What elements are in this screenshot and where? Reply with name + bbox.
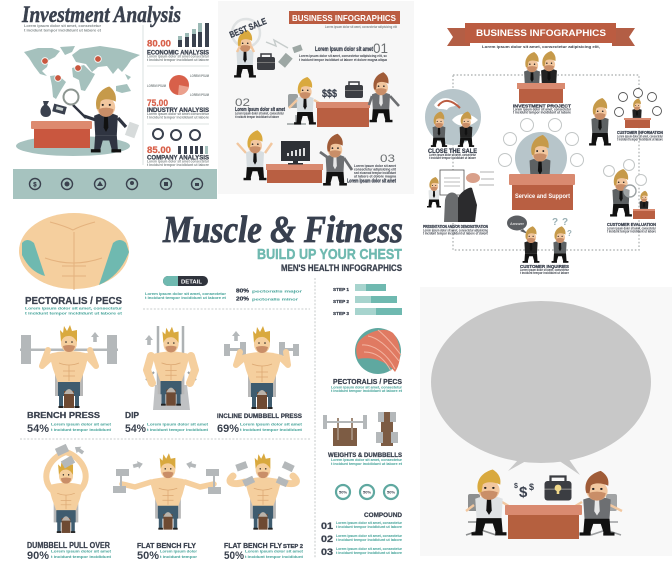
detail text: Lorem ipsum dolor sit amet, consectetur <box>145 291 226 296</box>
text: t incidunt tempor incididunt ut labore <box>147 163 209 167</box>
pie chart <box>169 75 189 95</box>
dumbbells <box>235 461 295 487</box>
dumbbell <box>55 444 75 468</box>
athlete <box>46 452 86 533</box>
weight bench <box>323 415 367 446</box>
step bars: STEP 2 <box>333 299 349 305</box>
ring charts: 50% <box>387 490 395 494</box>
world map <box>24 46 140 99</box>
compound list: Lorem ipsum dolor sit amet, consectetur <box>336 533 402 538</box>
label: Lorem ipsum dolor sit amet, consectetur adipisicing <box>423 228 488 232</box>
step 3 text: ut labore et dolore magna <box>354 174 397 178</box>
arrow <box>145 335 153 345</box>
flat bench fly step 2: t incidunt tempor incididunt <box>245 554 304 559</box>
ring charts: 50% <box>363 490 371 494</box>
dip <box>125 410 209 435</box>
exercise: flat bench fly <box>113 453 221 530</box>
right businessman <box>572 471 622 536</box>
flat bench fly: Lorem ipsum dolor <box>160 548 197 554</box>
step 1 text: Lorem ipsum dolor sit amet <box>315 46 374 53</box>
weights heading: WEIGHTS & DUMBBELLS <box>328 452 402 459</box>
customer evaluation <box>604 160 657 234</box>
dotted loop <box>453 75 639 250</box>
arrow <box>91 332 99 342</box>
athlete <box>230 453 296 530</box>
intro text: Lorem ipsum dolor sit amet, consectetur <box>24 24 102 28</box>
step 3 text: sed eiusmod tempor incididunt <box>354 170 396 175</box>
dumbbell pull over: t incidunt tempor incididunt <box>51 554 112 559</box>
label <box>617 130 663 142</box>
dumbbell rack <box>376 412 398 446</box>
exercise: dip <box>145 326 196 410</box>
ribbon banner <box>447 23 635 46</box>
main title: Muscle & Fitness <box>162 209 403 251</box>
dip frame <box>146 326 196 410</box>
weights text: t incidunt tempor incididunt ut labore et <box>331 461 403 466</box>
muscle circle <box>355 328 401 374</box>
right chair <box>591 494 621 535</box>
subtitle: BUILD UP YOUR CHEST <box>257 247 402 263</box>
dashed dividers <box>20 278 315 558</box>
step 2 text: Lorem ipsum dolor sit amet, consectetur <box>235 110 284 116</box>
dollar signs <box>514 482 534 501</box>
compound list: Lorem ipsum dolor sit amet, consectetur <box>336 520 402 525</box>
percentages: 20% <box>236 296 249 302</box>
incline dumbbell press: t incidunt tempor incididunt <box>240 427 303 432</box>
small man at desk <box>633 191 655 219</box>
pie labels: LOREM IPSUM <box>190 74 209 78</box>
bench press: BRENCH PRESS <box>27 410 100 420</box>
detail text: t incidunt tempor incididunt ut labore et <box>145 295 227 300</box>
heading: INDUSTRY ANALYSIS <box>147 107 210 114</box>
briefcase with bulb <box>544 476 572 500</box>
dip: Lorem ipsum dolor sit amet <box>147 422 209 426</box>
ribbon subtitle: Lorem ipsum dolor sit amet, consectetur adipisicing elit, <box>482 44 600 49</box>
arrows <box>132 460 197 470</box>
step 3 text: Lorem ipsum dolor sit amet <box>354 163 397 168</box>
dip: DIP <box>125 410 139 420</box>
label: CUSTOMER INFORMATION <box>617 130 663 135</box>
weights text <box>331 457 403 466</box>
question marks: ? <box>562 217 568 228</box>
step 2 text: 02 <box>235 97 250 109</box>
label: CLOSE THE SALE <box>428 149 477 155</box>
desk <box>31 121 92 148</box>
exercise: dumbbell pull over <box>46 444 86 533</box>
divider <box>143 25 209 165</box>
people pictogram <box>178 146 208 154</box>
customer inquiries <box>507 216 572 275</box>
desk: Service and Support <box>515 193 571 200</box>
ribbon banner: BUSINESS INFOGRAPHICS <box>476 28 606 39</box>
speech bubble: Answer <box>510 221 524 226</box>
monitor <box>281 141 310 164</box>
compound list <box>321 520 403 557</box>
step 2 chair <box>287 94 306 124</box>
desk <box>505 505 582 539</box>
icon band <box>13 169 217 199</box>
industry analysis <box>147 74 210 120</box>
pecs heading right: PECTORALIS / PECS <box>333 379 402 386</box>
pecs text: t incidunt tempor incididunt ut labore et <box>25 310 123 316</box>
dumbbell pull over: Lorem ipsum dolor sit amet <box>51 548 112 554</box>
heading: COMPANY ANALYSIS <box>147 154 210 162</box>
incline dumbbell press: INCLINE DUMBBELL PRESS <box>217 413 303 420</box>
flat bench fly: 50% <box>137 550 159 562</box>
value: 80.00 <box>147 38 171 50</box>
labels: row 1 <box>27 410 303 435</box>
ring charts: 50% <box>339 490 347 494</box>
step 3 text: consectetur adipisicing elit <box>354 166 397 172</box>
man with magnifier <box>610 169 636 217</box>
step 2 text: t incidunt tempor incididunt ut labore <box>235 114 279 119</box>
label <box>428 149 477 160</box>
businessman <box>84 87 126 152</box>
ring charts <box>153 129 200 140</box>
step bars <box>333 284 402 317</box>
bench press: 54% <box>27 423 49 435</box>
compound heading: COMPOUND <box>364 512 402 519</box>
exercise: incline dumbbell press <box>224 326 299 409</box>
floor ellipse <box>16 136 130 156</box>
label <box>423 224 489 236</box>
flat bench fly: FLAT BENCH FLY <box>137 543 196 550</box>
dollar signs: $ <box>514 483 518 490</box>
label: CUSTOMER EVALUATION <box>607 222 656 227</box>
pie labels: LOREM IPSUM <box>147 84 166 88</box>
presenter <box>427 177 441 208</box>
ring charts <box>336 485 398 499</box>
dumbbell pull over <box>27 541 112 562</box>
company analysis <box>147 129 210 167</box>
pecs text right: t incidunt tempor incididunt ut labore et <box>331 388 403 393</box>
label: Lorem ipsum dolor sit amet, consectetur <box>429 152 476 157</box>
compound list: Lorem ipsum dolor sit amet, consectetur <box>336 546 402 551</box>
label <box>520 264 570 275</box>
percentages: 80% <box>236 288 249 294</box>
text: Lorem ipsum dolor sit amet consectetur <box>147 54 210 58</box>
globe <box>425 89 481 145</box>
step 2 text: Lorem ipsum dolor sit amet <box>235 107 285 113</box>
step 1 text: 01 <box>373 40 388 56</box>
flat bench fly step 2: FLAT BENCH FLY <box>224 543 282 550</box>
close the sale <box>425 89 481 160</box>
step 2 standing man <box>369 72 399 122</box>
label <box>513 104 572 114</box>
label: t incidunt tempor incididunt ut labore et dolore <box>423 230 489 236</box>
banner: BUSINESS INFOGRAPHICS <box>292 13 396 23</box>
value: 85.00 <box>147 145 171 156</box>
detail text <box>145 291 227 300</box>
board <box>440 170 464 195</box>
audience <box>444 188 477 222</box>
dollar signs: $ <box>529 482 534 492</box>
icons <box>604 160 646 186</box>
orbit icons <box>498 118 584 166</box>
dumbbell pull over: DUMBBELL PULL OVER <box>27 541 110 550</box>
question marks <box>552 217 572 238</box>
exercise: bench press <box>20 325 118 408</box>
percentages: pectoralis major <box>252 288 303 294</box>
flat bench fly step 2: STEP 2 <box>283 544 303 550</box>
labels: row 2 <box>27 541 304 562</box>
price arrow <box>266 40 303 68</box>
detail pill <box>163 276 208 286</box>
investment project <box>513 51 572 114</box>
value: 75.00 <box>147 98 168 109</box>
exercise: flat bench fly step 2 <box>230 453 296 530</box>
briefcase <box>257 54 275 70</box>
compound list: 02 <box>321 534 333 544</box>
man <box>589 98 611 146</box>
customer information <box>589 88 663 146</box>
hub circle <box>515 132 567 184</box>
label: Lorem ipsum dolor sit amet, consectetur <box>520 267 569 272</box>
compound list: t incidunt tempor incididunt ut labore <box>336 537 403 542</box>
brain graphic <box>466 172 494 185</box>
arrow <box>232 331 240 341</box>
panel: business infographics steps <box>218 1 414 194</box>
detail pill: DETAIL <box>181 280 202 286</box>
label: t incidunt tempor incididunt ut labore <box>429 155 477 160</box>
best sale label: BEST SALE <box>228 16 268 40</box>
service and support hub <box>498 118 584 210</box>
weights text: Lorem ipsum dolor sit amet, consectetur <box>331 457 402 462</box>
step 3 cheering man <box>237 130 272 180</box>
title: Investment Analysis <box>21 2 181 27</box>
pecs heading: PECTORALIS / PECS <box>25 296 122 307</box>
pecs illustration <box>19 213 129 290</box>
step 3 text: 03 <box>380 153 395 165</box>
pecs text: Lorem ipsum dolor sit amet, consectetur <box>25 306 123 310</box>
arrow <box>73 444 85 456</box>
step bars: STEP 1 <box>333 287 349 293</box>
step 1 text: t incidunt tempor incididunt ut labore et dolore magna aliqua <box>299 57 388 62</box>
compound list: t incidunt tempor incididunt ut labore <box>336 524 403 529</box>
compound list: t incidunt tempor incididunt ut labore <box>336 550 403 555</box>
step 3 text: Lorem ipsum dolor sit amet <box>347 178 396 184</box>
pecs text right <box>331 384 403 393</box>
partners <box>522 51 559 96</box>
magnifier <box>64 90 86 118</box>
incline dumbbell press: Lorem ipsum dolor sit amet <box>240 422 303 426</box>
dollar signs: $ <box>519 484 528 501</box>
pie labels: LOREM IPSUM <box>190 93 209 97</box>
text <box>147 54 210 62</box>
icon: money bag <box>40 101 51 117</box>
label: t incidunt tempor incididunt ut labore <box>520 270 570 275</box>
panel: investment analysis <box>13 2 217 199</box>
banner subtitle: Lorem ipsum dolor sit amet, consectetur adipisicing elit <box>325 25 398 29</box>
label: Lorem ipsum dolor sit amet, consectetur <box>513 106 571 112</box>
athlete <box>42 325 96 408</box>
percentages <box>236 288 303 302</box>
economic analysis <box>147 23 210 62</box>
operator <box>527 135 553 193</box>
text: t incidunt tempor incididunt ut labore <box>147 58 209 62</box>
percentages: pectoralis minor <box>252 296 299 302</box>
icon band: $ <box>33 182 37 188</box>
dip: t incidunt tempor incididunt <box>147 427 209 432</box>
panel: muscle and fitness <box>19 209 403 562</box>
dollar signs: $$$ <box>322 88 337 100</box>
step 3 text <box>347 153 397 184</box>
presentation <box>423 170 494 236</box>
step 1 man <box>232 19 260 78</box>
step 2 text <box>235 97 285 119</box>
bench press: Lorem ipsum dolor sit amet <box>51 422 112 426</box>
desk <box>517 83 565 103</box>
label: t incidunt tempor incididunt ut labore <box>513 110 572 114</box>
intro text <box>24 24 102 32</box>
map pins <box>42 56 101 81</box>
icon: cash <box>52 104 67 115</box>
question marks: ? <box>552 217 558 228</box>
dip: 54% <box>125 423 146 435</box>
flat bench fly step 2: 50% <box>224 550 244 562</box>
question marks: ? <box>567 229 572 238</box>
panel: speech bubble meeting <box>420 287 672 556</box>
speech balloon <box>431 301 651 475</box>
label: PRESENTATION AND/OR DEMONSTRATION <box>423 224 488 229</box>
step 2 desk <box>316 102 370 127</box>
text <box>147 112 210 120</box>
flat bench fly step 2: Lorem ipsum dolor sit amet <box>245 548 304 554</box>
dumbbells <box>224 342 299 356</box>
text: Lorem ipsum dolor sit amet consectetur <box>147 112 210 116</box>
step 1 text <box>299 40 388 62</box>
men <box>523 226 568 263</box>
athlete <box>236 326 288 409</box>
bench press <box>27 410 112 435</box>
dumbbell pull over: 90% <box>27 550 49 562</box>
step bars: STEP 3 <box>333 311 349 317</box>
bench press: t incidunt tempor incididunt <box>51 427 112 432</box>
text: Lorem ipsum dolor sit amet consectetur <box>147 160 210 164</box>
men <box>431 112 474 147</box>
flat bench fly <box>137 543 197 562</box>
step 2 seated man <box>289 77 321 125</box>
intro text: t incidunt tempor incididunt ut labore et <box>24 28 102 32</box>
paper <box>125 122 139 138</box>
heading: ECONOMIC ANALYSIS <box>147 50 210 56</box>
step 3 standing man <box>320 134 352 186</box>
pie labels <box>147 74 209 97</box>
subtitle 2: MEN'S HEALTH INFOGRAPHICS <box>281 263 402 273</box>
athlete <box>122 453 214 530</box>
left businessman <box>466 470 512 535</box>
dumbbells <box>113 469 221 494</box>
label: CUSTOMER INQUIRIES <box>520 264 569 269</box>
magnifier ring <box>232 19 260 47</box>
text: t incidunt tempor incididunt ut labore <box>147 116 209 120</box>
pecs text right: Lorem ipsum dolor sit amet, consectetur <box>331 384 402 390</box>
athlete <box>147 327 195 406</box>
label: INVESTMENT PROJECT <box>513 104 571 108</box>
compound list: 03 <box>321 547 333 557</box>
text <box>147 160 210 167</box>
briefcase <box>345 82 363 98</box>
orbit icons <box>614 88 662 116</box>
barbell <box>20 335 118 364</box>
flat bench fly step 2 <box>224 543 304 562</box>
incline dumbbell press: 69% <box>217 423 239 435</box>
panel: business infographics network <box>423 23 663 275</box>
left chair <box>466 494 496 535</box>
flat bench fly: t incidunt tempor <box>160 554 197 559</box>
label <box>607 222 657 234</box>
small man at desk <box>624 98 651 128</box>
pecs text <box>25 306 123 316</box>
bar chart <box>178 23 209 47</box>
compound list: 01 <box>321 521 333 531</box>
incline dumbbell press <box>217 413 303 435</box>
step 1 text: Lorem ipsum dolor sit amet, consectetur adipisicing elit, sc <box>299 53 388 58</box>
step 3 desk <box>266 164 323 183</box>
